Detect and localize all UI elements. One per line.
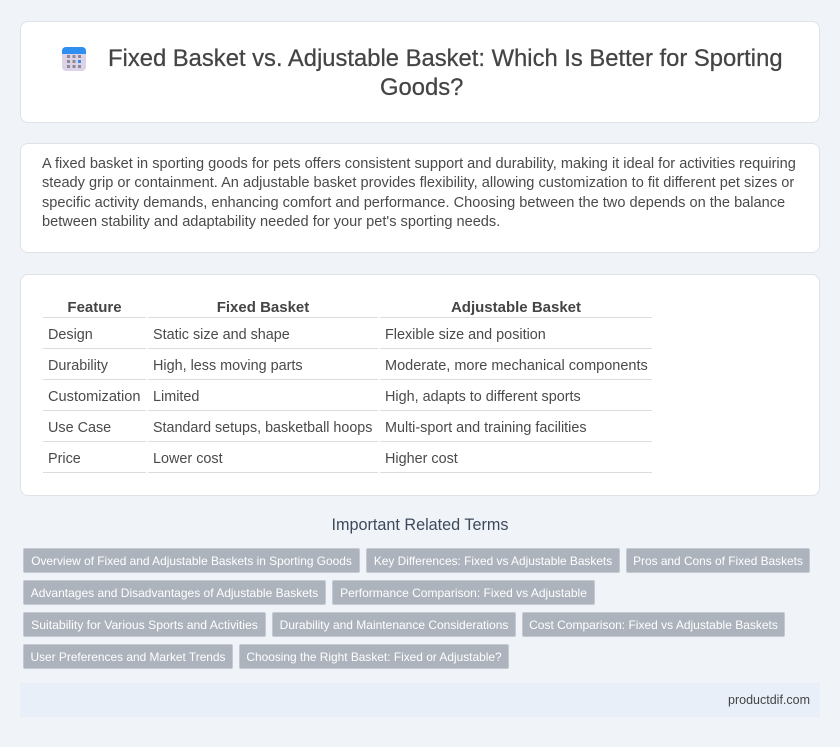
comparison table: Moderate, more mechanical components bbox=[385, 358, 648, 374]
comparison table: Use Case bbox=[48, 420, 111, 436]
related terms tags: Performance Comparison: Fixed vs Adjustable bbox=[340, 586, 587, 600]
related terms tags: Overview of Fixed and Adjustable Baskets in Sporting Goods bbox=[31, 554, 352, 568]
panel: summary bbox=[20, 143, 820, 253]
text block: summary: steady grip or containment. An adjustable basket provides flexibility, allowing customization to fit different pet sizes or bbox=[42, 175, 794, 191]
comparison table bbox=[43, 299, 652, 473]
heading: related terms: Important Related Terms bbox=[332, 516, 508, 534]
related terms tags: Suitability for Various Sports and Activities bbox=[31, 618, 258, 632]
panel: title card bbox=[20, 21, 820, 123]
comparison table: Multi-sport and training facilities bbox=[385, 420, 587, 436]
icon: calendar bbox=[62, 47, 86, 71]
related terms tags: Advantages and Disadvantages of Adjustable Baskets bbox=[31, 586, 318, 600]
title: Fixed Basket vs. Adjustable Basket: Which Is Better for Sporting bbox=[108, 45, 783, 72]
comparison table: High, less moving parts bbox=[153, 358, 303, 374]
comparison table: Fixed Basket bbox=[217, 299, 309, 316]
related terms tags: Durability and Maintenance Considerations bbox=[280, 618, 508, 632]
comparison table: Durability bbox=[48, 358, 108, 374]
text block: summary: specific activity demands, enhancing comfort and performance. Choosing between the two depends on the balance bbox=[42, 195, 785, 211]
comparison table: Price bbox=[48, 451, 81, 467]
panel: comparison table bbox=[20, 274, 820, 496]
related terms tags: Cost Comparison: Fixed vs Adjustable Baskets bbox=[529, 618, 778, 632]
footer: site name: productdif.com bbox=[728, 693, 810, 707]
related terms tags: Pros and Cons of Fixed Baskets bbox=[633, 554, 803, 568]
comparison table: Static size and shape bbox=[153, 327, 290, 343]
comparison table: Standard setups, basketball hoops bbox=[153, 420, 372, 436]
title: Goods? bbox=[380, 74, 463, 101]
text block: summary: between stability and adaptability needed for your pet's sporting needs. bbox=[42, 214, 500, 230]
title bbox=[108, 45, 783, 101]
related terms tags: Choosing the Right Basket: Fixed or Adjustable? bbox=[246, 650, 502, 664]
comparison table: Design bbox=[48, 327, 93, 343]
footer bbox=[20, 683, 820, 717]
comparison table: Flexible size and position bbox=[385, 327, 546, 343]
comparison table: Lower cost bbox=[153, 451, 223, 467]
text block: summary: A fixed basket in sporting goods for pets offers consistent support and durability, making it ideal for activities requiring bbox=[42, 156, 796, 172]
comparison table: Limited bbox=[153, 389, 199, 405]
comparison table: Feature bbox=[67, 299, 122, 316]
comparison table: High, adapts to different sports bbox=[385, 389, 581, 405]
comparison table: Customization bbox=[48, 389, 140, 405]
text block: summary bbox=[42, 156, 796, 230]
comparison table: Higher cost bbox=[385, 451, 458, 467]
related terms tags: User Preferences and Market Trends bbox=[31, 650, 225, 664]
related terms tags: Key Differences: Fixed vs Adjustable Baskets bbox=[374, 554, 612, 568]
comparison table: Adjustable Basket bbox=[451, 299, 581, 316]
related terms tags bbox=[23, 548, 810, 669]
